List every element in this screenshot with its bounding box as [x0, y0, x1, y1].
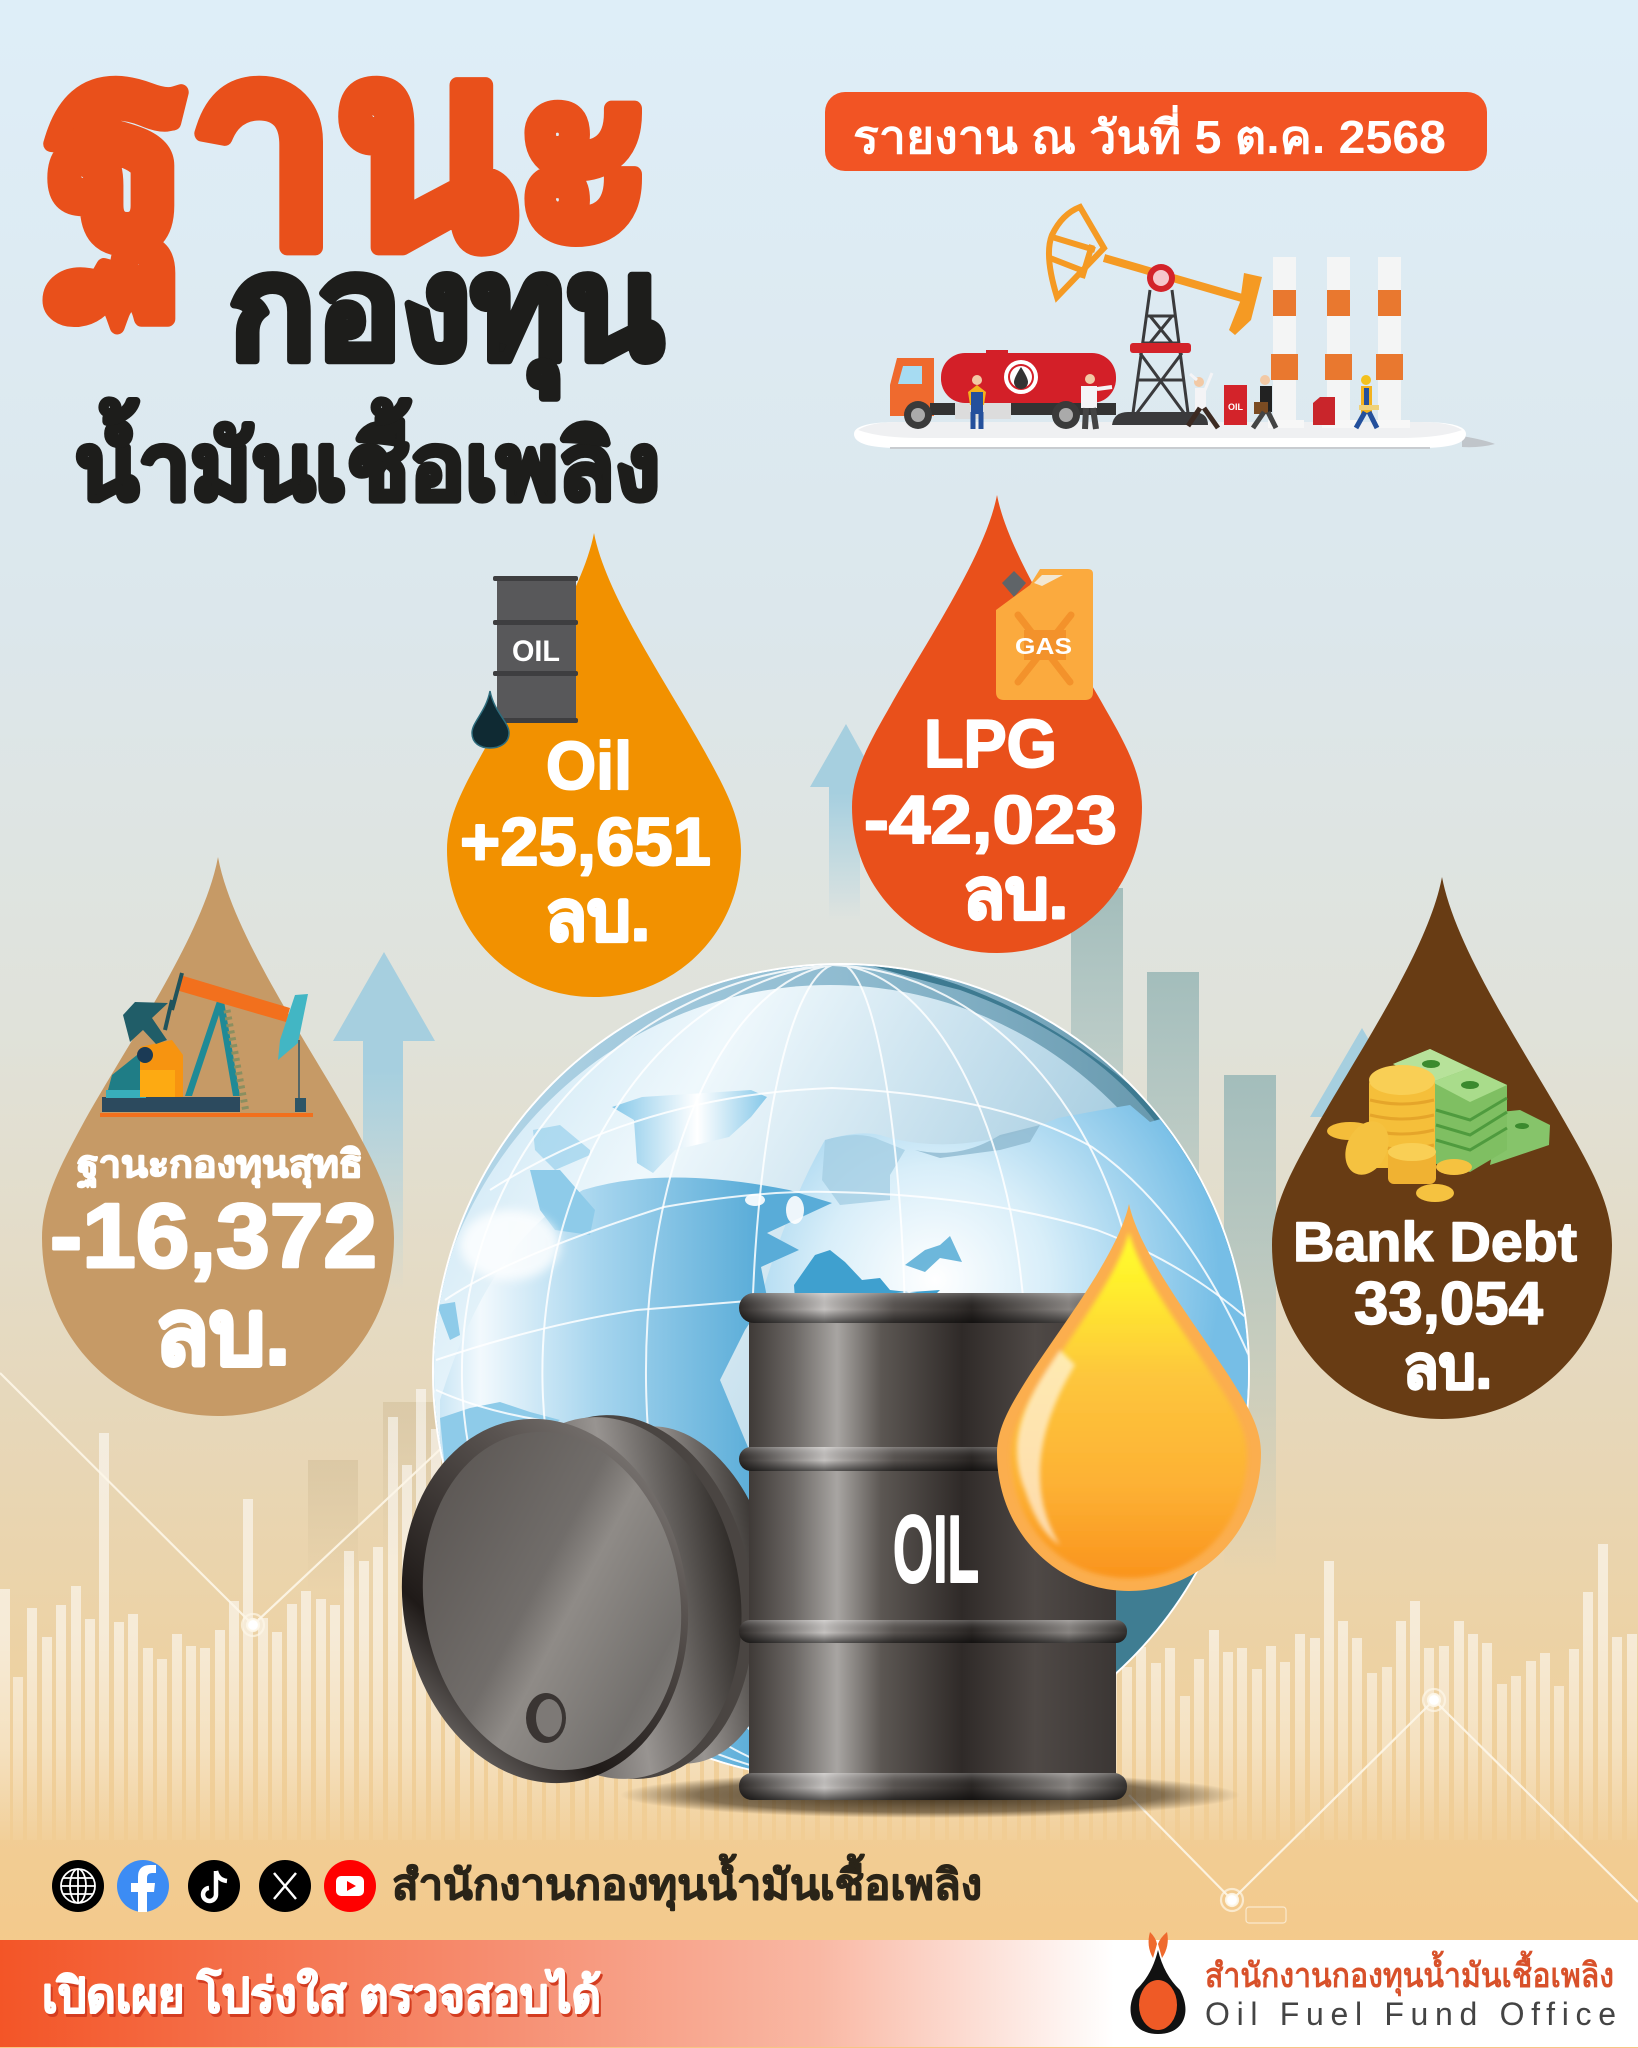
unit: ลบ. [963, 855, 1068, 933]
icon: website [52, 1860, 104, 1912]
tanker truck [890, 350, 1116, 429]
date badge: รายงาน ณ วันที่ 5 ต.ค. 2568 [853, 105, 1446, 163]
icon: coins and cash [1327, 1049, 1550, 1202]
golden oil drop [997, 1204, 1261, 1591]
background pillars [308, 888, 1276, 1590]
pump tower [1049, 207, 1262, 425]
icon: jerry can [996, 569, 1093, 700]
icon: oil barrel [472, 576, 578, 748]
fallen oil barrel [376, 1396, 801, 1804]
Europe [794, 1236, 962, 1293]
unit: ลบ. [155, 1282, 290, 1384]
footer organisation name [1205, 1950, 1616, 2032]
chimneys [1268, 257, 1410, 428]
icon: oil barrel: OIL [512, 635, 560, 668]
footer organisation name: Oil Fuel Fund Office [1205, 1996, 1616, 2032]
panel: bank debt drop [1272, 877, 1612, 1419]
background line chart [0, 1373, 1638, 1923]
label: LPG [924, 706, 1057, 782]
left islands [437, 1125, 595, 1470]
value: 33,054 [1354, 1270, 1544, 1337]
illustration: oil industry scene [854, 207, 1495, 448]
lower right shade [1116, 1572, 1196, 1672]
globe [425, 960, 1270, 1815]
unit: ลบ. [1403, 1334, 1492, 1401]
unit: ลบ. [545, 877, 650, 955]
icon: facebook [117, 1860, 169, 1912]
icon: youtube [324, 1860, 376, 1912]
barrel plug [526, 1693, 566, 1743]
red fuel can [1313, 397, 1335, 425]
red oil drum: OIL [1228, 402, 1244, 412]
standing oil barrel [739, 1293, 1127, 1800]
Greenland [612, 1090, 767, 1173]
panel: LPG drop [852, 495, 1142, 953]
office name: สำนักงานกองทุนน้ำมันเชื้อเพลิง [392, 1853, 982, 1911]
platform [854, 422, 1495, 448]
slogan: เปิดเผย โปร่งใส ตรวจสอบได้ [42, 1967, 601, 2023]
red oil drum [1224, 385, 1247, 425]
barrel shadow [620, 1772, 1240, 1818]
grid [436, 963, 1260, 1781]
title: ฐานะ [46, 0, 654, 329]
value: -16,372 [50, 1186, 377, 1287]
date badge [825, 92, 1487, 171]
label: Bank Debt [1293, 1210, 1577, 1273]
background bar chart [0, 1389, 1637, 1840]
workers [968, 373, 1379, 429]
footer band [0, 1940, 1638, 2047]
title [46, 0, 663, 519]
icon: X [259, 1860, 311, 1912]
panel: oil drop [447, 533, 741, 997]
title: น้ำมันเชื้อเพลิง [75, 398, 660, 519]
ocean [440, 1178, 832, 1780]
icon: jerry can: GAS [1015, 633, 1072, 659]
value: -42,023 [864, 782, 1117, 858]
panel: net fund position drop [42, 857, 394, 1416]
barrel label: OIL [893, 1496, 979, 1603]
social icons row [52, 1860, 376, 1912]
dark rim [873, 966, 1202, 1184]
value: +25,651 [460, 804, 711, 880]
title: กองทุน [229, 228, 663, 397]
icon: pumpjack [100, 973, 313, 1117]
label: ฐานะกองทุนสุทธิ [77, 1144, 363, 1189]
logo [1131, 1932, 1185, 2034]
label: Oil [546, 728, 632, 804]
land mass [764, 1105, 1248, 1672]
icon: tiktok [188, 1860, 240, 1912]
background arrows [333, 724, 1414, 1300]
